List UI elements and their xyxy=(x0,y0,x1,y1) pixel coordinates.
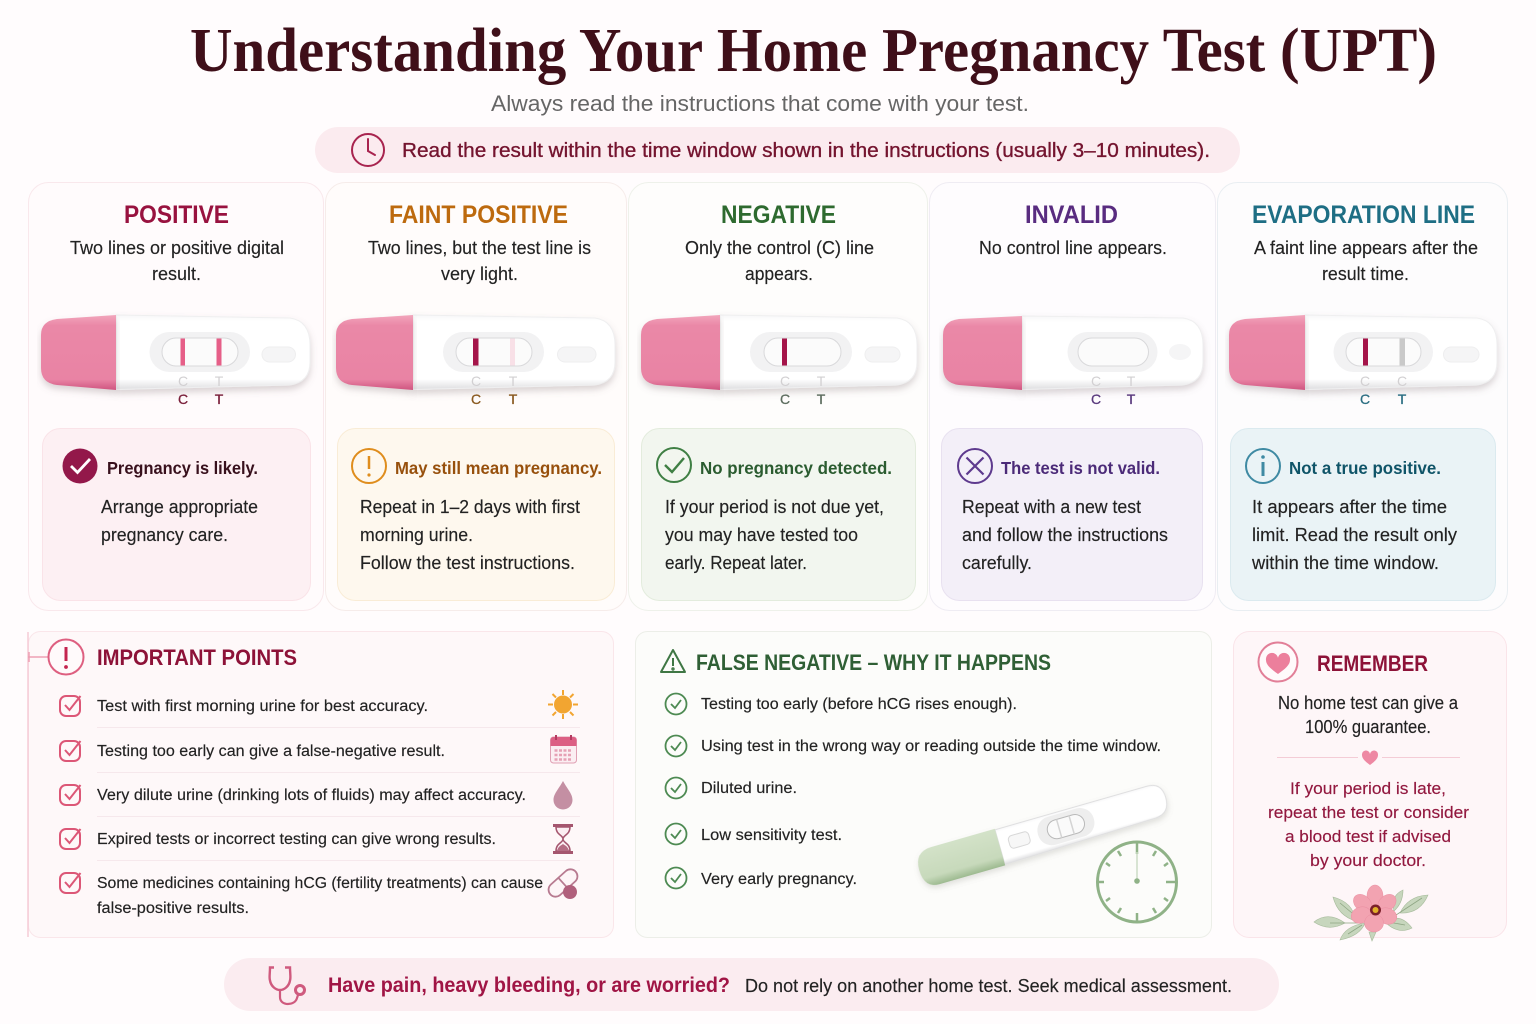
point 1 xyxy=(60,696,428,716)
advice text xyxy=(1268,779,1469,870)
description: faint positive: very light. xyxy=(441,264,518,284)
icon: checkbox xyxy=(60,829,80,849)
result box: positive xyxy=(42,428,310,600)
reason 4 xyxy=(666,824,842,844)
result text: Arrange appropriate xyxy=(101,497,258,517)
test device: negative: T xyxy=(817,391,826,407)
divider with heart xyxy=(1277,750,1460,765)
result heading: May still mean pregnancy. xyxy=(395,458,602,478)
test device: invalid xyxy=(943,316,1203,407)
panel: faint positive xyxy=(326,182,626,610)
heading: important points: IMPORTANT POINTS xyxy=(97,645,297,670)
icon: exclamation xyxy=(352,449,386,483)
result text xyxy=(101,497,258,545)
test device: evaporation line xyxy=(1229,315,1497,407)
test device: faint positive xyxy=(336,315,615,407)
point 5 xyxy=(60,873,543,917)
test device: evaporation line: C xyxy=(1360,373,1370,389)
description: negative: appears. xyxy=(745,264,813,284)
remember text: No home test can give a xyxy=(1278,693,1459,713)
test device: faint positive: C xyxy=(471,391,481,407)
illustration: tilted test xyxy=(914,781,1172,889)
panel: false negative xyxy=(636,632,1212,938)
reason 1: Testing too early (before hCG rises enough). xyxy=(701,696,1017,713)
point 3 xyxy=(60,785,526,805)
reason 4: Low sensitivity test. xyxy=(701,827,842,844)
description: positive xyxy=(70,238,284,284)
panel: positive xyxy=(28,182,324,610)
title: Understanding Your Home Pregnancy Test (UPT) xyxy=(190,17,1437,85)
advice text: repeat the test or consider xyxy=(1268,803,1469,822)
heading: invalid: INVALID xyxy=(1025,201,1118,229)
icon: alert circle xyxy=(48,640,84,674)
advice text: a blood test if advised xyxy=(1285,827,1451,846)
description: positive: result. xyxy=(152,264,201,284)
remember text xyxy=(1278,693,1459,737)
illustration: flower xyxy=(1314,885,1428,941)
test device: negative xyxy=(641,315,917,407)
result heading: The test is not valid. xyxy=(1001,458,1160,478)
test device: evaporation line: T xyxy=(1398,391,1407,407)
icon: sun xyxy=(548,690,578,719)
banner: seek medical help xyxy=(224,958,1279,1011)
icon: check xyxy=(62,448,98,484)
point text: Some medicines containing hCG (fertility treatments) can cause xyxy=(97,875,543,892)
test device: faint positive: C xyxy=(471,373,481,389)
icon: warning triangle xyxy=(661,650,685,672)
result text: It appears after the time xyxy=(1252,497,1447,517)
icon: check circle xyxy=(657,448,691,482)
advice text: by your doctor. xyxy=(1310,851,1426,870)
result text: morning urine. xyxy=(360,525,473,545)
point text: Testing too early can give a false-negative result. xyxy=(97,743,445,760)
test device: positive: T xyxy=(215,373,224,389)
result heading: Pregnancy is likely. xyxy=(107,458,258,478)
heading: evaporation line: EVAPORATION LINE xyxy=(1252,201,1475,229)
test device: positive: T xyxy=(215,391,224,407)
test device: evaporation line: C xyxy=(1397,373,1407,389)
panel: evaporation line xyxy=(1218,182,1508,610)
icon: clock xyxy=(352,134,384,166)
panel: invalid xyxy=(930,182,1216,610)
description: evaporation line: result time. xyxy=(1322,264,1409,284)
icon: hourglass xyxy=(553,826,573,852)
description: negative: Only the control (C) line xyxy=(685,238,874,258)
test device: faint positive: T xyxy=(509,391,518,407)
test device: positive: C xyxy=(178,391,188,407)
panel: important points xyxy=(28,632,614,938)
heading: negative: NEGATIVE xyxy=(721,201,836,229)
test device: invalid: C xyxy=(1091,391,1101,407)
icon: cross circle xyxy=(958,449,992,483)
subtitle: Always read the instructions that come with your test. xyxy=(491,91,1029,116)
test device: positive xyxy=(41,315,310,407)
description: invalid: No control line appears. xyxy=(979,238,1167,258)
icon: info xyxy=(1246,449,1280,483)
result text: early. Repeat later. xyxy=(665,553,807,573)
result box: faint positive xyxy=(338,428,614,600)
result text: within the time window. xyxy=(1251,553,1439,573)
test device: negative: T xyxy=(817,373,826,389)
result text xyxy=(1251,497,1457,573)
icon: checkbox xyxy=(60,696,80,716)
result text: carefully. xyxy=(962,553,1032,573)
icon: stethoscope xyxy=(270,968,304,1004)
test device: positive: C xyxy=(178,373,188,389)
icon: calendar xyxy=(550,735,576,763)
description: faint positive: Two lines, but the test line is xyxy=(368,238,591,258)
point text: Expired tests or incorrect testing can give wrong results. xyxy=(97,831,496,848)
icon: checkbox xyxy=(60,873,80,893)
result text: Repeat in 1–2 days with first xyxy=(360,497,580,517)
result text: and follow the instructions xyxy=(962,525,1168,545)
result heading: No pregnancy detected. xyxy=(700,458,892,478)
point text: false-positive results. xyxy=(97,900,249,917)
test device: invalid: C xyxy=(1091,373,1101,389)
heading: false negative: FALSE NEGATIVE – WHY IT HAPPENS xyxy=(696,650,1051,675)
advice text: Do not rely on another home test. Seek medical assessment. xyxy=(745,975,1232,996)
icon: drop xyxy=(554,781,572,810)
description: negative xyxy=(685,238,874,284)
point 4 xyxy=(60,829,496,849)
banner text: Read the result within the time window shown in the instructions (usually 3–10 minutes). xyxy=(402,140,1210,162)
description: evaporation line xyxy=(1254,238,1478,284)
result box: negative xyxy=(642,428,916,600)
point text: Test with first morning urine for best accuracy. xyxy=(97,698,428,715)
result text: Repeat with a new test xyxy=(962,497,1141,517)
result text xyxy=(962,497,1168,573)
test device: faint positive: T xyxy=(509,373,518,389)
reason 5: Very early pregnancy. xyxy=(701,871,857,888)
reason 3 xyxy=(666,778,797,798)
result box: evaporation line xyxy=(1230,428,1496,600)
result text xyxy=(665,497,884,573)
point text: Very dilute urine (drinking lots of fluids) may affect accuracy. xyxy=(97,787,526,804)
reason 3: Diluted urine. xyxy=(701,780,797,797)
description: evaporation line: A faint line appears after the xyxy=(1254,238,1478,258)
heading: remember: REMEMBER xyxy=(1317,651,1428,676)
remember text: 100% guarantee. xyxy=(1305,717,1431,737)
reason 2: Using test in the wrong way or reading outside the time window. xyxy=(701,738,1161,755)
icon: checkbox xyxy=(60,785,80,805)
result text: you may have tested too xyxy=(665,525,858,545)
advice text: If your period is late, xyxy=(1290,779,1446,798)
test device: invalid: T xyxy=(1127,391,1136,407)
heading: positive: POSITIVE xyxy=(124,201,229,229)
point 2 xyxy=(60,741,445,761)
result text: limit. Read the result only xyxy=(1252,525,1457,545)
result text: If your period is not due yet, xyxy=(665,497,884,517)
panel: remember xyxy=(1234,632,1506,941)
icon: checkbox xyxy=(60,741,80,761)
test device: negative: C xyxy=(780,391,790,407)
test device: negative: C xyxy=(780,373,790,389)
point text xyxy=(97,875,543,917)
test device: invalid: T xyxy=(1127,373,1136,389)
result text xyxy=(360,497,580,573)
result text: pregnancy care. xyxy=(101,525,228,545)
result heading: Not a true positive. xyxy=(1289,458,1441,478)
heading: faint positive: FAINT POSITIVE xyxy=(389,201,568,229)
reason 5 xyxy=(666,868,857,888)
banner: time window xyxy=(315,127,1240,173)
panel: negative xyxy=(628,182,928,610)
icon: pill xyxy=(546,866,580,900)
illustration: clock xyxy=(1097,842,1177,922)
description: faint positive xyxy=(368,238,591,284)
result text: Follow the test instructions. xyxy=(360,553,575,573)
description: positive: Two lines or positive digital xyxy=(70,238,284,258)
test device: evaporation line: C xyxy=(1360,391,1370,407)
result box: invalid xyxy=(942,428,1202,600)
icon: heart circle xyxy=(1258,642,1298,682)
warning text: Have pain, heavy bleeding, or are worried? xyxy=(328,974,730,997)
